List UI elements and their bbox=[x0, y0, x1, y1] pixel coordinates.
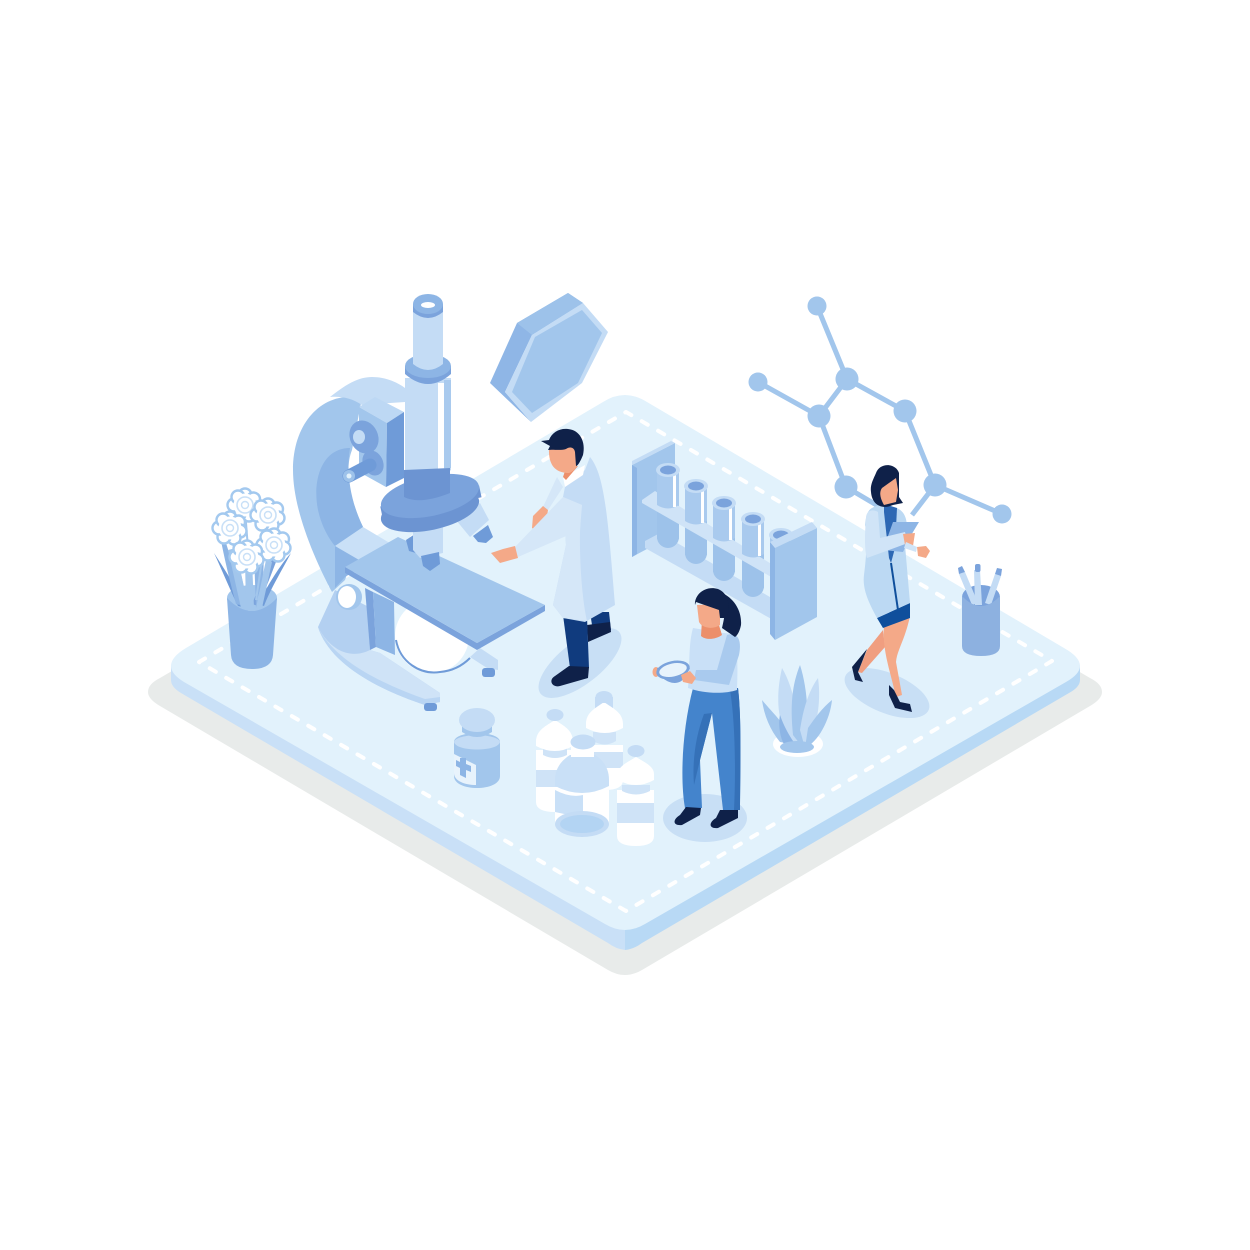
plant bbox=[762, 665, 832, 757]
vase back rim bbox=[227, 585, 277, 611]
focus block bbox=[343, 397, 404, 487]
back bottle bbox=[586, 691, 623, 790]
heels bbox=[852, 649, 867, 682]
tube bottoms bbox=[657, 500, 764, 597]
collar bbox=[563, 465, 585, 487]
stage bbox=[345, 537, 545, 650]
eyepiece bbox=[405, 294, 451, 384]
hands and bowl bbox=[652, 658, 696, 684]
woman with clipboard bbox=[838, 465, 936, 728]
bottles bbox=[536, 691, 654, 846]
platform dashed border bbox=[199, 412, 1052, 911]
medicine jar bbox=[454, 708, 500, 788]
platform top bbox=[171, 395, 1080, 930]
main tube bbox=[405, 378, 451, 480]
floor shadow bbox=[148, 405, 1102, 975]
column bbox=[365, 588, 376, 650]
platform bbox=[171, 395, 1080, 950]
lab coat bbox=[553, 457, 615, 622]
rack right board bbox=[775, 528, 817, 640]
woman head and hair bbox=[871, 465, 903, 507]
lower shelf bbox=[645, 533, 775, 621]
girl shadow bbox=[663, 794, 747, 842]
nosepiece bbox=[377, 466, 483, 540]
tube tops bbox=[656, 463, 793, 570]
shoes bbox=[675, 807, 701, 825]
objectives bbox=[406, 503, 493, 571]
pants bbox=[682, 688, 740, 810]
man shadow bbox=[528, 616, 632, 710]
back leg bbox=[858, 630, 885, 673]
coat bbox=[864, 505, 910, 618]
front leg bbox=[563, 615, 589, 668]
hexagon bbox=[490, 293, 608, 422]
microscope arm bbox=[293, 397, 363, 592]
left bottle bbox=[536, 709, 573, 812]
back leg bbox=[590, 612, 611, 638]
sweater bbox=[688, 628, 737, 693]
mirror bbox=[395, 599, 470, 673]
flower vase bbox=[212, 488, 291, 669]
test tube rack bbox=[632, 441, 817, 640]
forearm bbox=[865, 510, 908, 558]
front arm bbox=[515, 497, 582, 557]
platform left side bbox=[171, 665, 625, 950]
front bottle bbox=[617, 745, 654, 846]
upper shelf bbox=[642, 491, 773, 578]
girl with bowl bbox=[652, 588, 747, 842]
woman shadow bbox=[838, 658, 936, 728]
man head and hair bbox=[541, 429, 584, 480]
flowers bbox=[228, 488, 262, 522]
molecule bbox=[748, 296, 1012, 524]
vase body bbox=[227, 598, 277, 669]
back arm bbox=[543, 477, 563, 510]
skirt bbox=[877, 603, 910, 628]
clipboard bbox=[883, 522, 919, 552]
man in lab coat bbox=[491, 429, 632, 710]
base shelf bbox=[335, 527, 398, 567]
girl arm bbox=[694, 634, 740, 685]
base foot bbox=[318, 584, 440, 711]
microscope bbox=[293, 294, 545, 711]
rack left board bbox=[632, 443, 675, 557]
back foot bbox=[470, 648, 498, 677]
front leg bbox=[884, 616, 910, 697]
leaves and stems bbox=[214, 516, 291, 608]
platform right side bbox=[625, 665, 1080, 950]
flask bbox=[555, 734, 609, 837]
girl head and hair bbox=[695, 588, 741, 639]
pencil cup bbox=[958, 564, 1002, 656]
